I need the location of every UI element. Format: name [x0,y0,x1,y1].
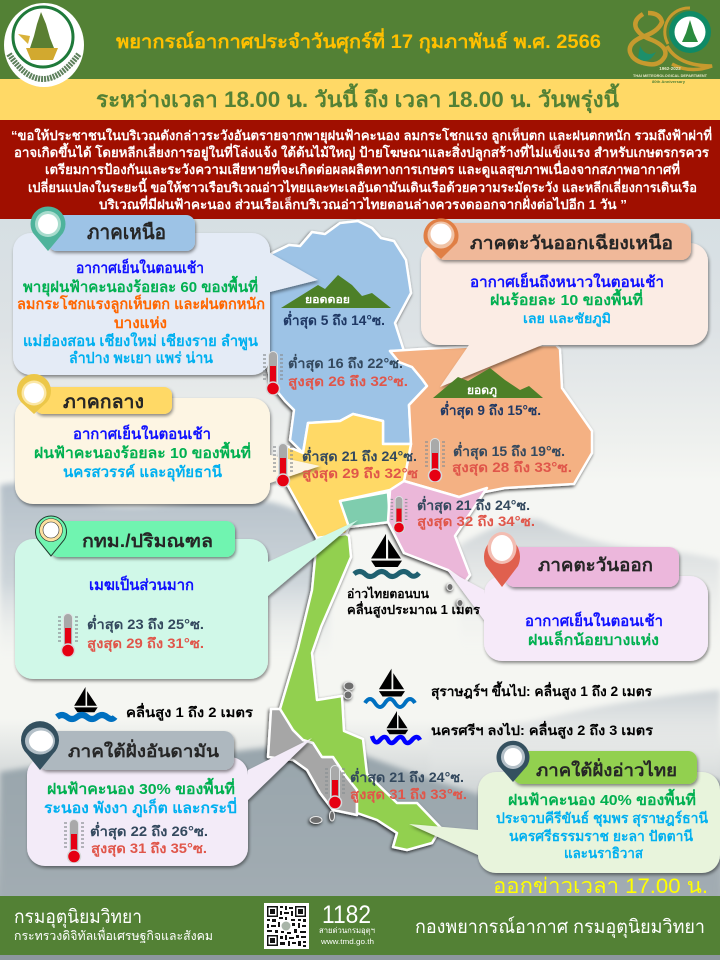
text: north temperatures: ต่ำสุด 16 ถึง 22°ซ. [288,353,403,372]
text: bangkok temperatures: ต่ำสุด 23 ถึง 25°ซ. [87,614,204,633]
text: north forecast: แม่ฮ่องสอน เชียงใหม่ เชียงราย ลำพูน [23,332,259,351]
footer [0,896,720,960]
title: พยากรณ์อากาศประจำวันศุกร์ที่ 17 กุมภาพันธ์ พ.ศ. 2566 [116,28,601,54]
logo: 80th anniversary: 80th Anniversary [652,80,686,84]
panel: bangkok [15,516,358,679]
text: north forecast: บางแห่ง [114,315,167,332]
icon: andaman thermometer [64,820,84,863]
icon: andaman boat [57,687,115,719]
heading tab: northeast: ภาคตะวันออกเฉียงเหนือ [470,233,673,253]
icon: pin [35,516,66,556]
icon: pin [30,206,65,251]
text: hotline: สายด่วนกรมอุตุฯ [319,926,375,935]
islands [310,584,463,824]
heading tab: north: ภาคเหนือ [87,221,166,244]
icon: nakhon boat [372,711,420,743]
text: northeast forecast: อากาศเย็นถึงหนาวในตอนเช้า [470,272,664,291]
icon: northeast thermometer [425,438,445,482]
icon: north mountain [281,275,391,308]
text: east temperatures: สูงสุด 32 ถึง 34°ซ. [417,514,535,530]
icon: pin [496,741,530,782]
text: gulf forecast [496,788,708,861]
period band [0,79,720,120]
text: gulf forecast: ประจวบคีรีขันธ์ ชุมพร สุราษฎร์ธานี [496,810,708,827]
icon: east thermometer [391,496,407,533]
text: northeast forecast [470,272,664,327]
text: north temperatures [288,353,408,390]
warning panel: เตรียมการป้องกันและระวังความเสียหายที่จะเกิดต่อผลผลิตทางการเกษตร และดูแลสุขภาพเนื่องจากสภาพอากาศที่ [45,160,680,178]
heading tab: north [48,215,195,251]
logo: 80th anniversary [630,8,712,84]
region: south gulf [280,534,441,850]
text: north forecast [17,258,265,367]
text: south temperatures: ต่ำสุด 21 ถึง 24°ซ. [350,767,464,786]
text: northeast forecast: เลย และชัยภูมิ [523,311,611,327]
heading tab: andaman [38,731,234,770]
panel: north [13,206,318,375]
heading tab: northeast [435,223,691,260]
icon: north thermometer [263,352,283,395]
heading tab: central [35,387,172,414]
text: north forecast: ลำปาง พะเยา แพร่ น่าน [69,350,214,367]
panel: northeast [421,218,708,387]
heading tab: central: ภาคกลาง [63,392,144,413]
map of Thailand [262,221,592,850]
region: central [280,414,411,538]
text: gulf forecast: นครศรีธรรมราช ยะลา ปัตตานี [509,828,693,844]
text: andaman waves: คลื่นสูง 1 ถึง 2 เมตร [126,702,254,721]
issue time: ออกข่าวเวลา 17.00 น. [493,875,708,898]
icon: south thermometer [325,766,345,809]
panel: east [447,532,708,661]
icon: pin [484,532,520,587]
text: east forecast: ฝนเล็กน้อยบางแห่ง [528,630,659,649]
header green bar [0,0,720,79]
text: central temperatures: สูงสุด 29 ถึง 32°ซ [302,466,418,482]
text: central forecast [34,424,251,482]
text: central temperatures [302,446,418,482]
region: northeast [390,345,592,497]
panel: andaman [21,721,312,866]
region: bangkok [340,492,390,527]
text: gulf forecast: และนราธิวาส [564,845,643,861]
icon: central thermometer [273,444,293,487]
heading tab: bangkok [50,521,235,557]
text: andaman temperatures [90,821,208,857]
text: hotline [319,901,375,946]
text: department name: กระทรวงดิจิทัลเพื่อเศรษฐกิจและสังคม [14,927,213,943]
text: department name: กรมอุตุนิยมวิทยา [14,907,142,929]
icon: northeast mountain [433,368,543,398]
text: andaman temperatures: สูงสุด 31 ถึง 35°ซ. [91,841,207,857]
text: north forecast: พายุฝนฟ้าคะนองร้อยละ 60 ของพื้นที่ [23,275,258,297]
text: north forecast: อากาศเย็นในตอนเช้า [76,258,204,277]
text: andaman temperatures: ต่ำสุด 22 ถึง 26°ซ. [90,821,208,840]
warning panel [0,120,720,219]
icon: pin [17,374,51,414]
text: central forecast: ฝนฟ้าคะนองร้อยละ 10 ของพื้นที่ [34,441,251,462]
warning panel: อาจเกิดขึ้นได้ โดยหลีกเลี่ยงการอยู่ในที่โล่งแจ้ง ใต้ต้นไม้ใหญ่ ป้ายโฆษณาและสิ่งปลูกสร้างที่ไม่แข็งแรง สำหรับเกษตรกรควร [14,142,709,161]
heading tab: andaman: ภาคใต้ฝั่งอันดามัน [68,739,219,761]
heading tab: gulf: ภาคใต้ฝั่งอ่าวไทย [536,758,677,780]
text: north forecast: ลมกระโชกแรงลูกเห็บตก และฝนตกหนัก [17,294,265,314]
icon: bangkok thermometer [58,614,78,657]
heading tab: east: ภาคตะวันออก [538,555,653,575]
text: hotline: www.tmd.go.th [320,937,374,946]
text: hotline: 1182 [322,901,371,929]
panel: gulf [409,741,720,873]
panel: central [15,374,320,504]
text: department name [14,907,213,943]
region: north [262,221,427,453]
icon: north mountain: ยอดดอย [305,294,350,306]
logo: 80th anniversary: 1962-2022 [659,66,681,71]
text: south temperatures [350,767,467,803]
text: upper gulf waves: คลื่นสูงประมาณ 1 เมตร [347,601,480,618]
region: east [388,481,487,582]
heading tab: east [505,547,679,587]
text: central forecast: นครสวรรค์ และอุทัยธานี [63,463,223,482]
text: north peak temperature: ต่ำสุด 5 ถึง 14°ซ. [283,310,385,329]
text: south temperatures: สูงสุด 31 ถึง 33°ซ. [350,787,467,803]
text: east forecast: อากาศเย็นในตอนเช้า [525,611,663,630]
text: bangkok temperatures [87,614,204,652]
region: south andaman [268,709,357,815]
text: bangkok forecast: เมฆเป็นส่วนมาก [89,575,194,594]
text: northeast temperatures: ต่ำสุด 15 ถึง 19°ซ. [453,441,565,460]
text: northeast temperatures [452,441,572,476]
text: upper gulf waves: อ่าวไทยตอนบน [347,586,429,601]
logo: ministry emblem [4,3,84,87]
text: gulf forecast: ฝนฟ้าคะนอง 40% ของพื้นที่ [508,788,696,809]
period band: ระหว่างเวลา 18.00 น. วันนี้ ถึง เวลา 18.00 น. วันพรุ่งนี้ [96,83,620,114]
text: andaman forecast [44,777,237,818]
text: upper gulf waves [347,586,480,618]
text: surat waves: สุราษฎร์ฯ ขึ้นไป: คลื่นสูง 1 ถึง 2 เมตร [431,681,653,700]
text: nakhon waves: นครศรีฯ ลงไป: คลื่นสูง 2 ถึง 3 เมตร [431,720,654,739]
text: central temperatures: ต่ำสุด 21 ถึง 24°ซ. [302,446,417,465]
text: bangkok temperatures: สูงสุด 29 ถึง 31°ซ. [87,636,204,652]
icon: pin [423,218,458,259]
text: andaman forecast: ฝนฟ้าคะนอง 30% ของพื้นที่ [47,777,235,798]
background sky and mountains [0,219,720,899]
icon: gulf upper boat [354,534,419,576]
warning panel: เปลี่ยนแปลงในระยะนี้ ขอให้ชาวเรือบริเวณอ่าวไทยและทะเลอันดามันเดินเรือด้วยความระมัดระวัง และหลีกเลี่ยงการเดินเรือ [28,177,697,195]
warning panel: บริเวณที่มีฝนฟ้าคะนอง ส่วนเรือเล็กบริเวณอ่าวไทยตอนล่างควรงดออกจากฝั่งต่อไปอีก 1 วัน ” [99,195,627,212]
text: east temperatures: ต่ำสุด 21 ถึง 24°ซ. [417,495,530,514]
warning panel: “ขอให้ประชาชนในบริเวณดังกล่าวระวังอันตรายจากพายุฝนฟ้าคะนอง ลมกระโชกแรง ลูกเห็บตก และฝนตกหนัก รวมถึงฟ้าผ่าที่ [11,126,712,144]
text: forecast bureau: กองพยากรณ์อากาศ กรมอุตุนิยมวิทยา [415,916,705,939]
text: northeast peak temperature: ต่ำสุด 9 ถึง 15°ซ. [440,400,541,419]
icon: surat boat [365,669,415,707]
icon: QR code [264,903,309,949]
text: east forecast [525,611,663,649]
text: northeast forecast: ฝนร้อยละ 10 ของพื้นที่ [490,288,643,309]
text: north temperatures: สูงสุด 26 ถึง 32°ซ. [288,374,408,390]
icon: pin [21,721,59,770]
text: northeast temperatures: สูงสุด 28 ถึง 33°ซ. [452,460,572,476]
icon: northeast mountain: ยอดภู [467,385,497,398]
text: andaman forecast: ระนอง พังงา ภูเก็ต และกระบี่ [44,797,237,818]
heading tab: gulf [513,751,697,784]
logo: 80th anniversary: THAI METEOROLOGICAL DEPARTMENT [633,74,708,78]
heading tab: bangkok: กทม./ปริมณฑล [82,531,213,551]
text: east temperatures [417,495,535,530]
text: central forecast: อากาศเย็นในตอนเช้า [73,424,211,443]
